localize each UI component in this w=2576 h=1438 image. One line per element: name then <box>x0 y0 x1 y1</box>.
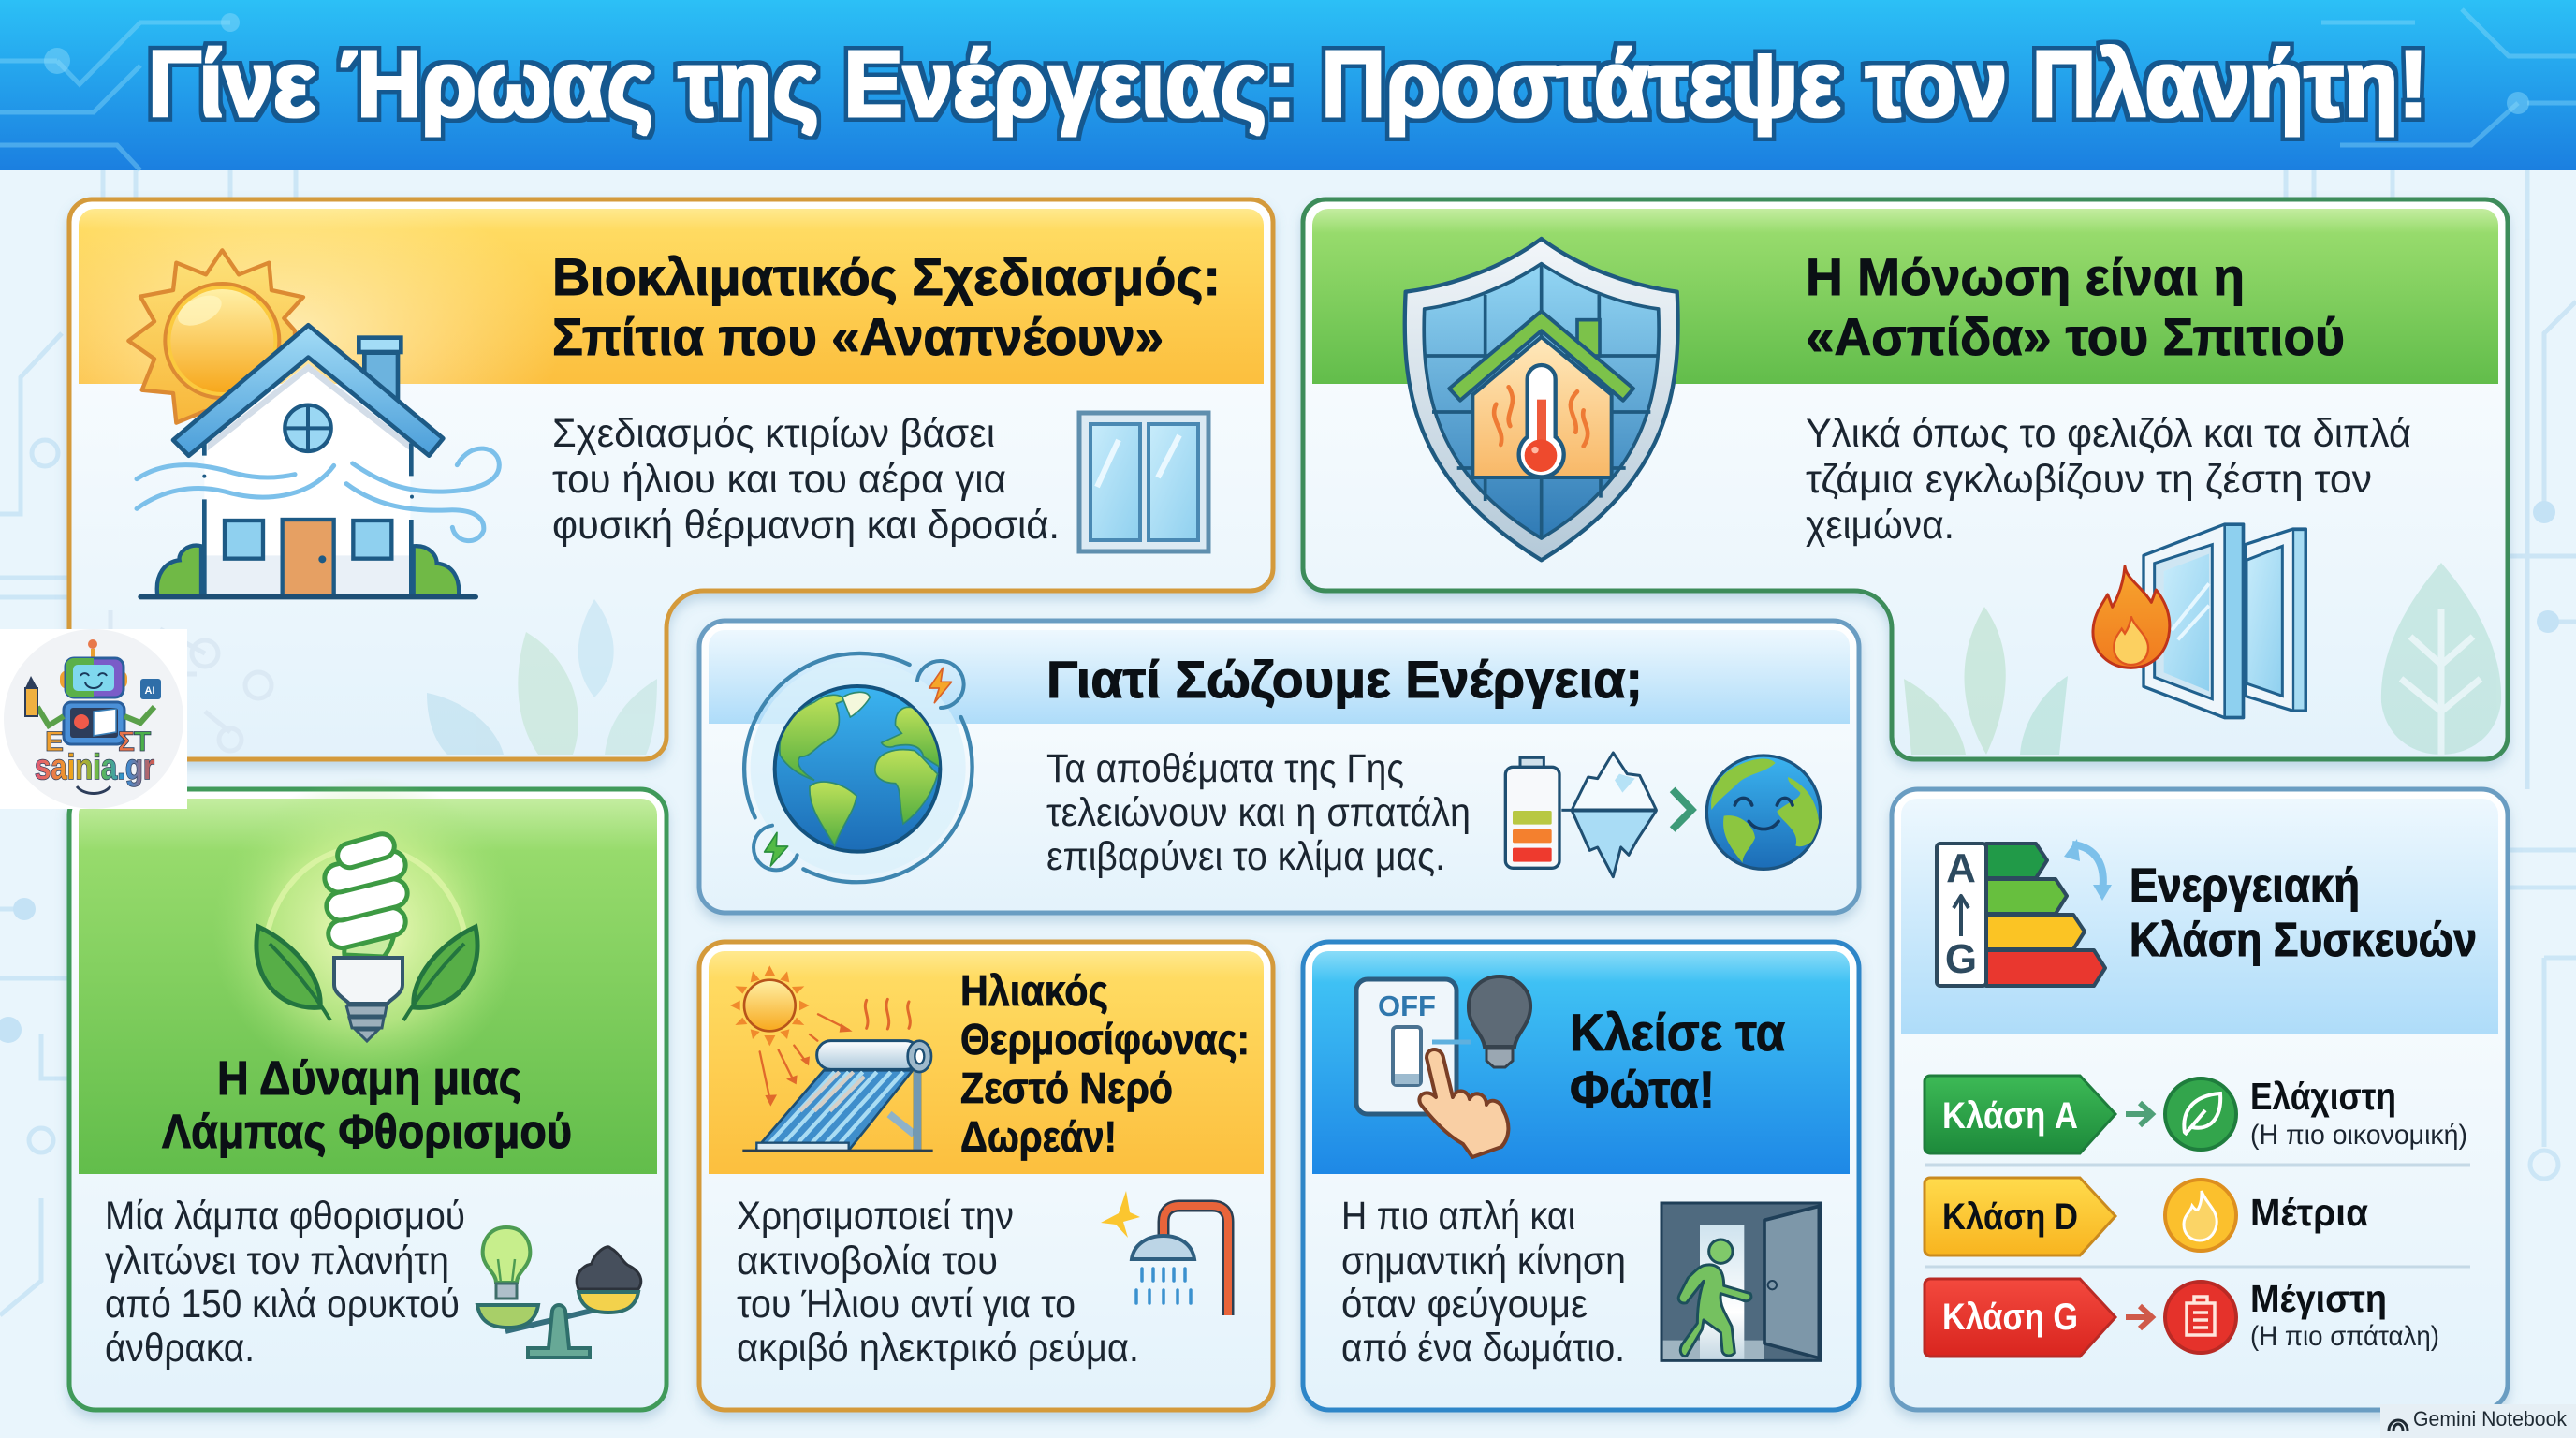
text block <box>552 411 1060 548</box>
icon: energy-saving bulb <box>212 777 521 1086</box>
icon: double window <box>2144 524 2305 718</box>
icon: solar heater <box>730 965 933 1151</box>
text block: χειμώνα. <box>1806 503 1954 548</box>
row: class G: Κλάση G <box>1942 1297 2078 1338</box>
panel: fluorescent lamp <box>69 777 666 1410</box>
text block: Σχεδιασμός κτιρίων βάσει <box>552 411 995 456</box>
row: class A: Κλάση A <box>1942 1095 2078 1137</box>
text block <box>1046 746 1471 879</box>
icon: light switch and hand <box>1356 976 1530 1157</box>
row: class G <box>1925 1277 2439 1357</box>
heading: Ενεργειακή <box>2130 858 2360 912</box>
row: class A: (Η πιο οικονομική) <box>2250 1120 2467 1151</box>
text block: από 150 κιλά ορυκτού <box>105 1282 460 1327</box>
heading: Θερμοσίφωνας: <box>960 1015 1250 1064</box>
logo: sainia.gr: Τ <box>134 726 151 757</box>
heading <box>1806 247 2345 366</box>
row: class A <box>1925 1075 2467 1153</box>
text block: Χρησιμοποιεί την <box>737 1194 1014 1239</box>
text block: ακτινοβολία του <box>737 1239 998 1284</box>
heading: Σπίτια που «Αναπνέουν» <box>552 307 1164 366</box>
text block: τελειώνουν και η σπατάλη <box>1046 790 1471 835</box>
text block: σημαντική κίνηση <box>1341 1239 1626 1284</box>
logo: sainia.gr: Σ <box>118 726 135 757</box>
icon: energy label: G <box>1945 936 1977 982</box>
logo: sainia.gr <box>0 629 187 809</box>
icon: double window with flame <box>2093 524 2305 718</box>
row: class D: Μέτρια <box>2250 1191 2368 1234</box>
panel: turn off the lights <box>1303 942 1859 1410</box>
text block <box>1806 411 2411 548</box>
icon: energy label: A <box>1946 845 1976 891</box>
icon: sun <box>128 250 303 423</box>
text block: του ήλιου και του αέρα για <box>552 457 1006 502</box>
heading: Κλάση Συσκευών <box>2130 913 2477 966</box>
heading: Η Δύναμη μιας <box>217 1051 521 1105</box>
heading <box>162 1051 572 1158</box>
text block: άνθρακα. <box>105 1326 255 1371</box>
title: Γίνε Ήρωας της Ενέργειας: Προστάτεψε τον Πλανήτη! <box>148 32 2428 137</box>
logo: sainia.gr: AI <box>144 685 155 697</box>
heading <box>1570 1003 1785 1119</box>
icon: earth with ring <box>744 653 973 882</box>
text block: φυσική θέρμανση και δροσιά. <box>552 503 1060 548</box>
heading <box>960 966 1250 1161</box>
text block: τζάμια εγκλωβίζουν τη ζέστη τον <box>1806 457 2372 502</box>
panel: insulation <box>1303 199 2508 759</box>
logo: sainia.gr: sainia.gr <box>35 748 154 787</box>
icon: flame <box>2093 566 2170 668</box>
panel: solar water heater <box>699 942 1273 1410</box>
heading: Γιατί Σώζουμε Ενέργεια; <box>1046 650 1643 709</box>
row: class D: Κλάση D <box>1942 1196 2078 1238</box>
icon: house with sun and wind <box>128 250 499 597</box>
text block: ακριβό ηλεκτρικό ρεύμα. <box>737 1326 1139 1371</box>
text block: επιβαρύνει το κλίμα μας. <box>1046 834 1445 879</box>
arrow <box>1673 789 1691 829</box>
heading <box>2130 858 2477 966</box>
text block: όταν φεύγουμε <box>1341 1282 1588 1327</box>
heading: Βιοκλιματικός Σχεδιασμός: <box>552 247 1221 306</box>
row: class G: Μέγιστη <box>2250 1277 2387 1320</box>
row: class D <box>1925 1178 2368 1255</box>
logo: sainia.gr: Ε <box>45 726 64 757</box>
icon: shield with house <box>1405 239 1678 560</box>
text block: του Ήλιου αντί για το <box>737 1282 1076 1327</box>
text block <box>1341 1194 1626 1371</box>
header banner <box>0 0 2576 170</box>
panel: why save energy <box>699 621 1859 913</box>
text block: από ένα δωμάτιο. <box>1341 1326 1625 1371</box>
text block: Μία λάμπα φθορισμού <box>105 1194 465 1239</box>
heading: Κλείσε τα <box>1570 1003 1785 1062</box>
watermark: Gemini Notebook <box>2380 1404 2576 1438</box>
panel: bioclimatic design <box>0 178 1273 759</box>
icon: iceberg <box>1561 753 1656 877</box>
heading: Ηλιακός <box>960 966 1108 1015</box>
panel: energy class <box>1892 789 2508 1410</box>
row: class A: Ελάχιστη <box>2250 1075 2396 1118</box>
row: class G: (Η πιο σπάταλη) <box>2250 1321 2439 1352</box>
watermark leaves <box>1904 563 2501 755</box>
heading: Φώτα! <box>1570 1060 1715 1119</box>
icon: smiling earth <box>1706 756 1821 869</box>
text block: Υλικά όπως το φελιζόλ και τα διπλά <box>1806 411 2411 456</box>
icon: energy label <box>1937 839 2112 986</box>
heading <box>552 247 1221 366</box>
heading: «Ασπίδα» του Σπιτιού <box>1806 307 2345 366</box>
icon: window <box>1079 413 1208 551</box>
text block <box>105 1194 465 1371</box>
icon: bulb vs coal scale <box>477 1227 641 1357</box>
heading: Δωρεάν! <box>960 1112 1117 1161</box>
watermark leaves <box>427 599 657 755</box>
text block <box>737 1194 1139 1371</box>
icon: person leaving room <box>1661 1203 1821 1360</box>
heading: Λάμπας Φθορισμού <box>162 1105 572 1158</box>
icon: battery <box>1505 757 1559 868</box>
heading: Η Μόνωση είναι η <box>1806 247 2245 306</box>
icon: light switch and hand: OFF <box>1378 990 1436 1022</box>
text block: Τα αποθέματα της Γης <box>1046 746 1404 791</box>
watermark: Gemini Notebook: Gemini Notebook <box>2413 1407 2568 1431</box>
text block: γλιτώνει τον πλανήτη <box>105 1239 449 1284</box>
icon: shower <box>1101 1191 1228 1315</box>
icons: battery, iceberg, earth <box>1505 753 1821 877</box>
heading: Ζεστό Νερό <box>960 1064 1173 1112</box>
text block: Η πιο απλή και <box>1341 1194 1575 1239</box>
